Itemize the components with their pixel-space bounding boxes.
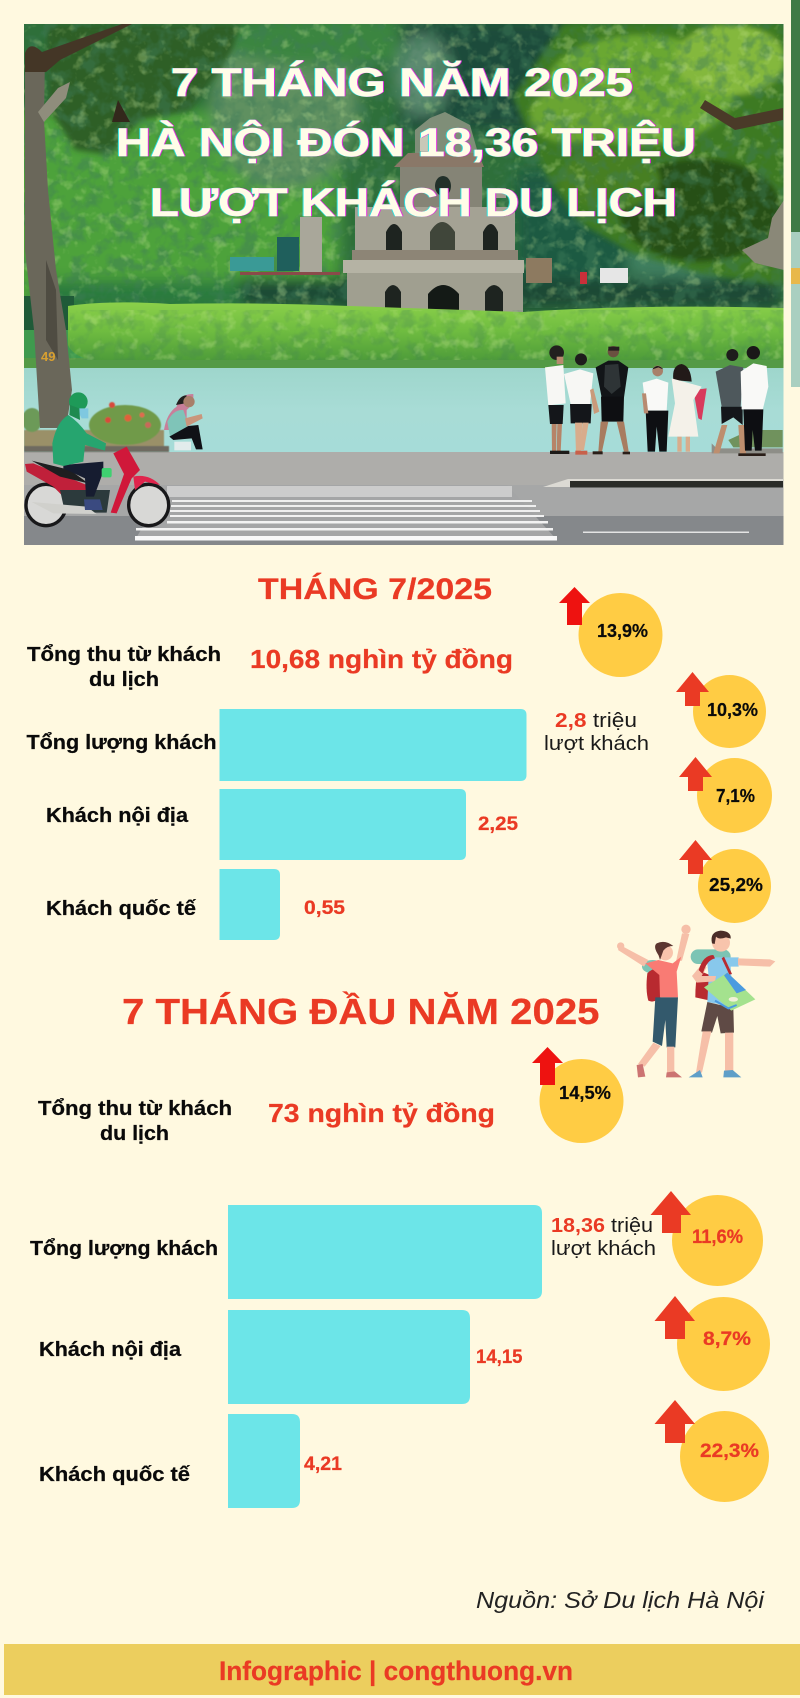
foliage background [24, 24, 784, 312]
bar: total visitors [30, 1205, 656, 1299]
growth badge 13,9%: 13,9% [597, 621, 648, 641]
growth badge 25,2% [679, 840, 771, 923]
title: LƯỢT KHÁCH DU LỊCH [150, 180, 677, 225]
panel: July 2025 [26, 587, 772, 940]
bar: total visitors: Tổng lượng khách [30, 1238, 218, 1260]
title [116, 60, 696, 225]
lake shore behind trunk [24, 296, 74, 330]
revenue label: Tổng thu từ khách [38, 1098, 232, 1120]
bar: international visitors: 0,55 [304, 898, 345, 919]
tourist 7 [738, 346, 768, 456]
bar: international visitors [39, 1414, 342, 1508]
growth badge 22,3% [654, 1400, 769, 1502]
growth badge 8,7% [654, 1296, 770, 1391]
man [689, 931, 775, 1077]
planter on the right [712, 430, 783, 453]
growth badge 14,5%: 14,5% [559, 1083, 611, 1103]
revenue value: 10,68 nghìn tỷ đồng [250, 644, 513, 674]
reflection strip [24, 358, 784, 368]
revenue label: du lịch [100, 1123, 169, 1145]
crosswalk [135, 485, 749, 540]
motorbike rider [25, 392, 169, 526]
growth badge 10,3%: 10,3% [707, 700, 758, 720]
bar: international visitors: Khách quốc tế [39, 1464, 191, 1486]
limb at right edge [742, 200, 784, 270]
growth badge 7,1% [679, 757, 772, 833]
lake water [24, 368, 784, 453]
bike body [25, 463, 86, 494]
road [24, 485, 784, 516]
bar: international visitors [46, 869, 345, 940]
bar: domestic visitors: Khách nội địa [39, 1339, 182, 1361]
section heading: July 2025: THÁNG 7/2025 [258, 572, 492, 606]
wheels [26, 484, 169, 526]
growth badge 7,1%: 7,1% [716, 786, 755, 806]
neighbouring photo strip at right edge [791, 0, 800, 387]
revenue label: du lịch [89, 669, 159, 691]
bar: domestic visitors: 2,25 [478, 814, 518, 835]
foliage texture [24, 24, 784, 308]
section heading: first seven months of 2025: 7 THÁNG ĐẦU NĂM 2025 [122, 991, 600, 1032]
panel: first seven months of 2025 [30, 1047, 770, 1508]
grass island [68, 302, 784, 360]
growth badge 25,2%: 25,2% [709, 875, 763, 895]
tourist 2 [564, 353, 599, 455]
tourist 4 [642, 366, 668, 452]
bar: total visitors [26, 709, 649, 781]
footer banner: Infographic | congthuong.vn [219, 1656, 573, 1686]
group of tourists [545, 345, 783, 456]
bar: total visitors: Tổng lượng khách [26, 732, 216, 754]
title: 7 THÁNG NĂM 2025 [171, 60, 633, 105]
tree trunk and branches: 49 [41, 349, 55, 364]
flower bed [22, 402, 169, 452]
tourist 5 in white dress [668, 364, 707, 452]
growth badge 14,5% [532, 1047, 624, 1143]
bar: total visitors: 2,8 triệu [555, 710, 637, 732]
growth badge 8,7%: 8,7% [703, 1329, 751, 1350]
rider [63, 462, 103, 497]
source note: Nguồn: Sở Du lịch Hà Nội [476, 1587, 765, 1613]
growth badge 11,6% [650, 1191, 763, 1286]
growth badge 10,3% [676, 672, 766, 748]
hero photo: Hoan Kiem lake and Turtle Tower [10, 14, 785, 545]
bar: international visitors: Khách quốc tế [46, 898, 197, 920]
branch on right tree [700, 100, 783, 130]
bar: domestic visitors: Khách nội địa [46, 805, 189, 827]
revenue label [27, 644, 221, 691]
turtle tower [343, 112, 524, 319]
illustration: two backpackers [617, 925, 775, 1077]
bar: domestic visitors [39, 1310, 523, 1404]
tourist 6 [713, 349, 746, 453]
sitting woman [164, 394, 203, 450]
footer banner [4, 1644, 800, 1695]
bar: total visitors: lượt khách [544, 733, 649, 755]
bar: domestic visitors [46, 789, 518, 860]
growth badge 13,9% [559, 587, 662, 677]
growth badge 11,6%: 11,6% [692, 1227, 743, 1248]
revenue label: Tổng thu từ khách [27, 644, 221, 666]
curb [543, 479, 783, 487]
left canopy [47, 25, 240, 155]
distant buildings [230, 217, 628, 284]
right tree canopy [513, 24, 785, 285]
growth badge 22,3%: 22,3% [700, 1441, 759, 1462]
tourist 3 [593, 346, 630, 454]
title: HÀ NỘI ĐÓN 18,36 TRIỆU [116, 119, 696, 165]
bar: total visitors: lượt khách [551, 1238, 656, 1260]
tree trunk and branches [25, 24, 132, 428]
woman [617, 925, 691, 1077]
bar: domestic visitors: 14,15 [476, 1347, 523, 1368]
tourist 1 [545, 345, 569, 454]
bar: total visitors: 18,36 triệu [551, 1215, 653, 1237]
bar: international visitors: 4,21 [304, 1454, 342, 1475]
pavement [24, 452, 784, 487]
revenue label [38, 1098, 232, 1145]
revenue value: 73 nghìn tỷ đồng [268, 1098, 495, 1128]
